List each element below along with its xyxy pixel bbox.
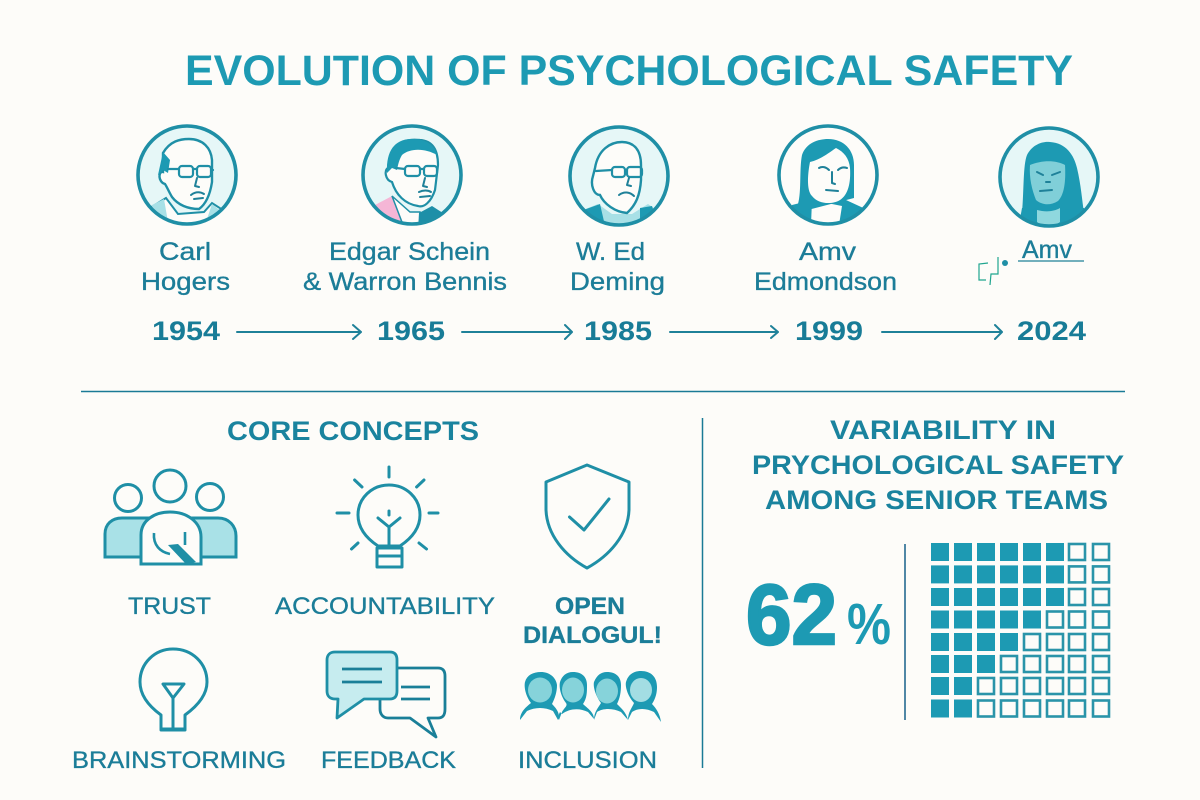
icon: shield, open dialogue bbox=[523, 465, 662, 649]
heading: variability bbox=[752, 415, 1124, 515]
name: Amy Edmondson bbox=[754, 238, 897, 296]
stat: 62 percent bbox=[746, 568, 891, 663]
stat: 62 percent: 62 bbox=[746, 568, 837, 663]
icon: brainstorming lightbulb bbox=[72, 649, 286, 774]
year 1954: 1954 bbox=[152, 316, 220, 346]
heading: variability: VARIABILITY IN bbox=[830, 415, 1056, 445]
arrow bbox=[237, 325, 361, 339]
name: W. Ed Deming: Deming bbox=[570, 268, 665, 296]
icon: brainstorming lightbulb: BRAINSTORMING bbox=[72, 747, 286, 774]
panel: timeline bbox=[138, 126, 1098, 346]
year 1965: 1965 bbox=[377, 316, 445, 346]
name: W. Ed Deming: W. Ed bbox=[576, 238, 645, 266]
waffle chart: 62 percent bbox=[931, 543, 1109, 718]
year 1999: 1999 bbox=[795, 316, 863, 346]
icon: trust: TRUST bbox=[128, 593, 211, 620]
panel: core concepts bbox=[72, 416, 662, 774]
icon: trust bbox=[105, 470, 236, 620]
icon: feedback speech bubbles: FEEDBACK bbox=[321, 747, 456, 774]
heading: variability: AMONG SENIOR TEAMS bbox=[765, 485, 1108, 515]
stat: 62 percent: % bbox=[847, 592, 891, 657]
icon: accountability lightbulb bbox=[275, 467, 495, 620]
portrait: W. Edwards Deming bbox=[570, 127, 668, 230]
icon: inclusion group of people: INCLUSION bbox=[518, 747, 657, 774]
name: Amy, 2024: Amv bbox=[1022, 236, 1072, 264]
name: Edgar Schein and Warron Bennis bbox=[303, 238, 507, 296]
name: Amy, 2024 bbox=[979, 236, 1084, 285]
name: Edgar Schein and Warron Bennis: Edgar Schein bbox=[329, 238, 490, 266]
heading: variability: PRYCHOLOGICAL SAFETY bbox=[752, 450, 1124, 480]
year 1985: 1985 bbox=[584, 316, 652, 346]
year 2024: 2024 bbox=[1017, 316, 1086, 346]
arrow bbox=[462, 325, 572, 339]
portrait: Amy Edmondson bbox=[779, 126, 877, 235]
portrait: Amy, 2024 bbox=[1000, 128, 1098, 230]
panel: variability bbox=[746, 415, 1124, 720]
portrait: Edgar Schein and Warren Bennis bbox=[363, 126, 461, 230]
portrait: Carl Rogers bbox=[138, 126, 236, 230]
icon: feedback speech bubbles bbox=[321, 652, 456, 774]
arrow bbox=[670, 326, 778, 338]
name: Carl Rogers: Hogers bbox=[141, 268, 230, 296]
heading: core concepts: CORE CONCEPTS bbox=[227, 416, 479, 446]
name: Carl Rogers bbox=[141, 238, 230, 296]
name: Amy Edmondson: Edmondson bbox=[754, 268, 897, 296]
title: EVOLUTION OF PSYCHOLOGICAL SAFETY bbox=[185, 47, 1073, 95]
icon: shield, open dialogue: OPEN bbox=[555, 593, 625, 620]
icon: shield, open dialogue: DIALOGUL! bbox=[523, 622, 662, 649]
icon: accountability lightbulb: ACCOUNTABILITY bbox=[275, 593, 495, 620]
name: Amy Edmondson: Amv bbox=[799, 238, 857, 266]
name: W. Ed Deming bbox=[570, 238, 665, 296]
name: Carl Rogers: Carl bbox=[159, 238, 211, 266]
arrow bbox=[882, 325, 1002, 339]
icon: inclusion group of people bbox=[518, 671, 661, 774]
name: Edgar Schein and Warron Bennis: & Warron Bennis bbox=[303, 268, 507, 296]
